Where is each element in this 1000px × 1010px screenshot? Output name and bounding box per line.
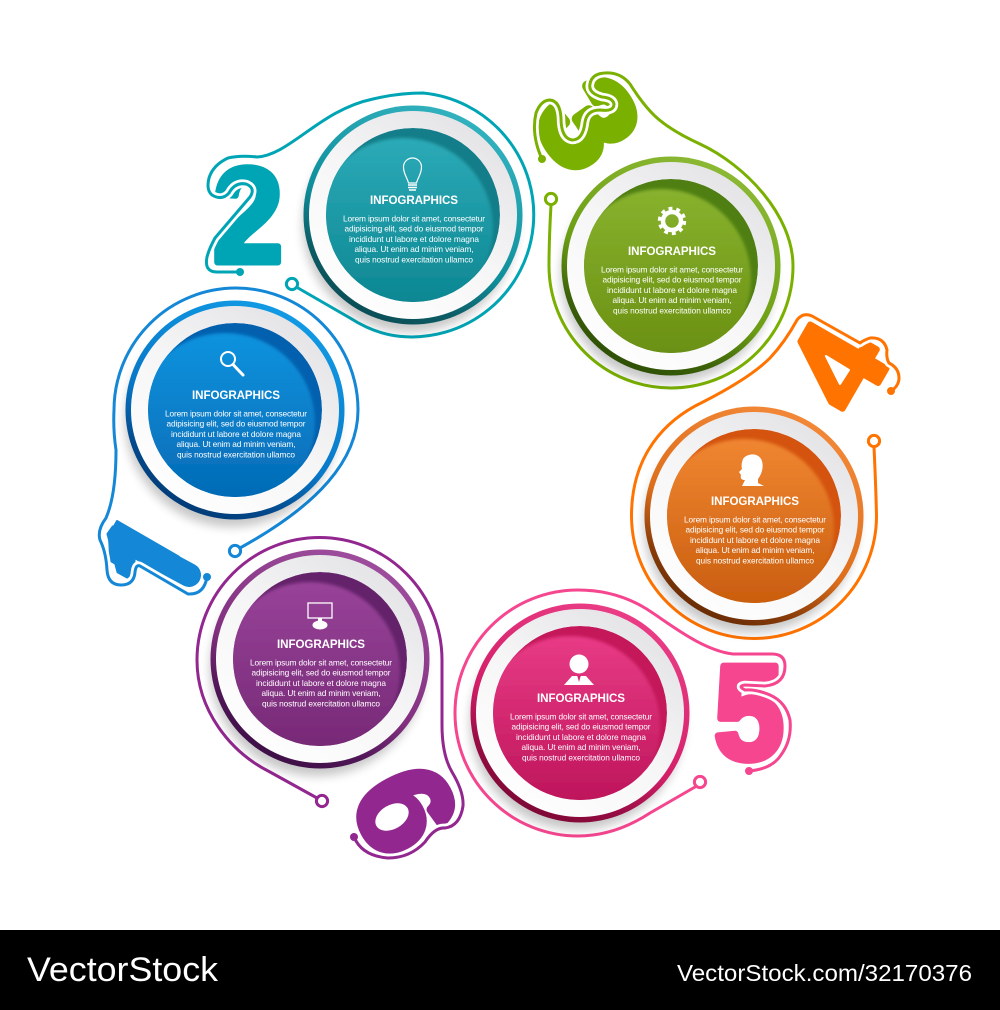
line end dot: green xyxy=(538,155,546,163)
body text xyxy=(510,712,652,762)
step 1: blue xyxy=(98,286,360,596)
body text: quis nostrud exercitation ullamco xyxy=(522,752,640,762)
connector line: blue xyxy=(99,288,358,594)
body text: aliqua. Ut enim ad minim veniam, xyxy=(354,244,474,254)
connector line: teal xyxy=(206,93,534,337)
step 6: purple xyxy=(196,536,465,860)
body text: adipisicing elit, sed do eiusmod tempor xyxy=(166,419,306,429)
heading: INFOGRAPHICS xyxy=(628,245,716,258)
heading: INFOGRAPHICS xyxy=(277,638,365,651)
body text: incididunt ut labore et dolore magna xyxy=(256,678,386,688)
body text: incididunt ut labore et dolore magna xyxy=(607,285,737,295)
body text: Lorem ipsum dolor sit amet, consectetur xyxy=(684,514,826,524)
footer id: VectorStock.com/32170376 xyxy=(677,960,972,986)
connector line: green xyxy=(534,73,793,388)
body text: adipisicing elit, sed do eiusmod tempor xyxy=(512,722,651,732)
line end dot: blue xyxy=(203,573,211,581)
body text: aliqua. Ut enim ad minim veniam, xyxy=(612,295,732,305)
circle: orange xyxy=(644,406,864,633)
body text xyxy=(684,514,826,565)
body text: adipisicing elit, sed do eiusmod tempor xyxy=(686,525,825,535)
line end ring: blue xyxy=(229,545,241,557)
body text: quis nostrud exercitation ullamco xyxy=(177,449,295,459)
body text: Lorem ipsum dolor sit amet, consectetur xyxy=(510,712,652,722)
icon: person xyxy=(564,654,594,685)
body text: aliqua. Ut enim ad minim veniam, xyxy=(262,688,380,698)
body text: Lorem ipsum dolor sit amet, consectetur xyxy=(165,408,307,418)
line end ring: green xyxy=(545,193,557,205)
number 3: 3 xyxy=(510,53,667,193)
body text: incididunt ut labore et dolore magna xyxy=(516,732,646,742)
line end dot: teal xyxy=(236,268,244,276)
number 4: 4 xyxy=(758,300,917,433)
body text xyxy=(165,408,307,459)
footer brand: VectorStock xyxy=(27,951,219,989)
step 3: green xyxy=(532,71,794,390)
circle: pink xyxy=(470,604,690,830)
body text: adipisicing elit, sed do eiusmod tempor xyxy=(252,668,391,678)
line end ring: purple xyxy=(316,795,328,807)
body text: incididunt ut labore et dolore magna xyxy=(171,429,301,439)
step 4: orange xyxy=(632,300,917,638)
body text xyxy=(601,264,743,315)
icon: light bulb xyxy=(404,158,422,190)
body text: adipisicing elit, sed do eiusmod tempor xyxy=(344,224,484,234)
heading: INFOGRAPHICS xyxy=(537,692,625,705)
icon: magnifier xyxy=(221,352,243,375)
circle: teal xyxy=(303,106,522,332)
footer bar xyxy=(0,930,1000,1010)
step 5: pink xyxy=(455,590,790,836)
connector line: purple xyxy=(197,538,463,858)
line end dot: orange xyxy=(887,387,895,395)
body text: incididunt ut labore et dolore magna xyxy=(690,535,820,545)
body text: Lorem ipsum dolor sit amet, consectetur xyxy=(343,214,485,224)
body text: quis nostrud exercitation ullamco xyxy=(696,555,814,565)
number 2: 2 xyxy=(213,140,283,291)
body text: aliqua. Ut enim ad minim veniam, xyxy=(522,742,640,752)
number 5: 5 xyxy=(714,637,784,788)
icon: head silhouette xyxy=(739,454,764,486)
body text: adipisicing elit, sed do eiusmod tempor xyxy=(602,275,742,285)
body text xyxy=(250,658,392,708)
connector line: orange xyxy=(632,315,899,638)
line end dot: purple xyxy=(350,833,358,841)
line end ring: pink xyxy=(694,776,706,788)
body text xyxy=(343,214,485,264)
step 2: teal xyxy=(206,93,534,337)
circle: green xyxy=(561,156,780,383)
body text: quis nostrud exercitation ullamco xyxy=(355,254,473,264)
circle: blue xyxy=(125,300,344,527)
body text: quis nostrud exercitation ullamco xyxy=(613,305,731,315)
circle: purple xyxy=(210,550,430,776)
body text: quis nostrud exercitation ullamco xyxy=(262,698,380,708)
line end dot: pink xyxy=(745,767,753,775)
heading: INFOGRAPHICS xyxy=(370,194,458,207)
body text: Lorem ipsum dolor sit amet, consectetur xyxy=(250,658,392,668)
icon: gear xyxy=(660,208,684,234)
body text: aliqua. Ut enim ad minim veniam, xyxy=(176,439,296,449)
icon: monitor xyxy=(308,603,332,630)
body text: Lorem ipsum dolor sit amet, consectetur xyxy=(601,264,743,274)
number 1 xyxy=(106,520,201,590)
heading: INFOGRAPHICS xyxy=(711,495,799,508)
body text: incididunt ut labore et dolore magna xyxy=(349,234,479,244)
connector line: pink xyxy=(455,590,790,836)
line end ring: teal xyxy=(286,278,298,290)
heading: INFOGRAPHICS xyxy=(192,389,280,402)
number 1: 1 xyxy=(71,488,226,618)
body text: aliqua. Ut enim ad minim veniam, xyxy=(696,545,814,555)
number 6: 6 xyxy=(324,743,487,876)
line end ring: orange xyxy=(868,435,880,447)
